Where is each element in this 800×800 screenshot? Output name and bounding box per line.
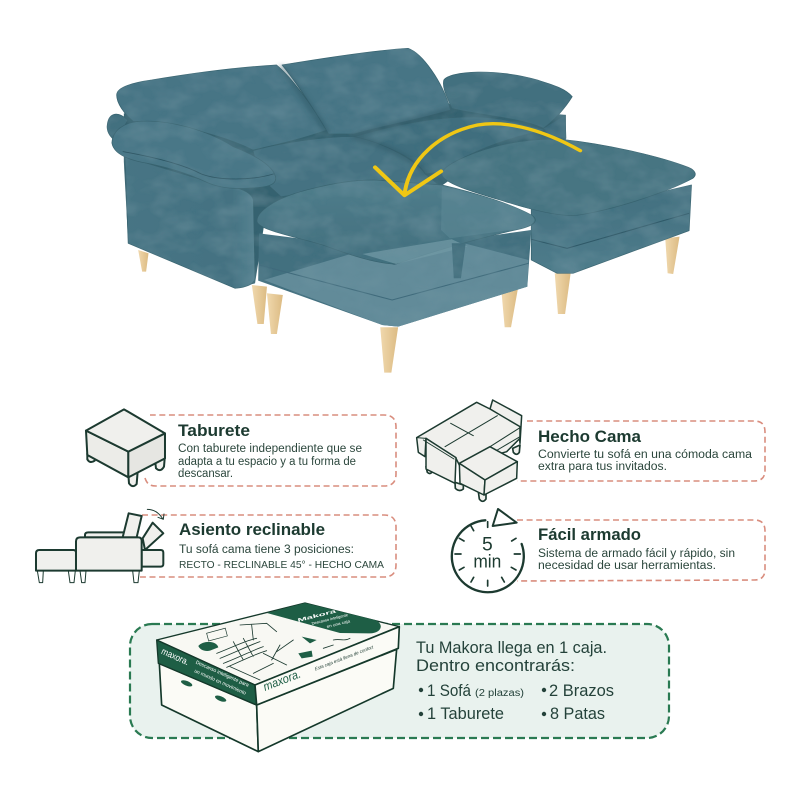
- description: Tu sofá cama tiene 3 posiciones:: [179, 544, 354, 556]
- heading: Fácil armado: [538, 525, 641, 544]
- icon: 5 minute timer: [452, 509, 524, 592]
- icon: sofa bed: [417, 400, 522, 501]
- icon: reclining sofa: [36, 509, 164, 583]
- illustration: shipping box: [157, 603, 399, 752]
- yellow curved arrow: [375, 124, 580, 195]
- intro text: [416, 638, 607, 675]
- box texts: Descanso inteligente: [311, 612, 349, 626]
- right ottoman legs: [555, 237, 680, 314]
- box texts: maxora.: [160, 646, 191, 667]
- box texts: Esta caja está llena de confort: [314, 644, 375, 672]
- description: [178, 443, 362, 480]
- intro text: Dentro encontrarás:: [416, 656, 575, 675]
- right ottoman upholstery: [442, 139, 695, 273]
- dashed frame: [517, 520, 765, 581]
- description: Convierte tu sofá en una cómoda cama: [538, 449, 753, 461]
- icon: 5 minute timer: min: [473, 551, 501, 572]
- lid illustration lines: [198, 623, 350, 680]
- box texts: [160, 608, 375, 697]
- panel: box contents: [130, 603, 669, 752]
- sofa body: [107, 48, 572, 288]
- lid label patch: [267, 603, 381, 633]
- box texts: maxora.: [261, 667, 303, 694]
- panel: Fácil armado: [452, 509, 765, 592]
- description: [538, 548, 735, 572]
- description: [179, 544, 384, 571]
- contents list: 8 Patas: [550, 704, 605, 723]
- description: Con taburete independiente que se: [178, 443, 362, 455]
- box texts: Descanso inteligente para: [195, 660, 250, 689]
- front ottoman legs: [267, 287, 518, 373]
- dashed frame: [145, 415, 396, 486]
- dashed green frame: [130, 624, 669, 738]
- lid side left: [157, 640, 257, 705]
- contents list: 1 Taburete: [427, 704, 504, 723]
- description: necesidad de usar herramientas.: [538, 560, 716, 572]
- panel: Asiento reclinable: [36, 509, 396, 583]
- dashed frame: [517, 421, 765, 481]
- lid top: [157, 603, 399, 685]
- sofa shading creases: [282, 67, 450, 173]
- heading: Hecho Cama: [538, 427, 642, 446]
- dashed frame: [140, 515, 396, 577]
- right ottoman: [442, 139, 695, 314]
- contents list: 1 Sofá: [427, 681, 471, 700]
- contents list: [419, 681, 614, 723]
- intro text: Tu Makora llega en 1 caja.: [416, 638, 607, 657]
- lid side right: [255, 627, 399, 705]
- description: adapta a tu espacio y a tu forma de: [178, 456, 356, 468]
- description: extra para tus invitados.: [538, 461, 667, 473]
- box texts: en una caja: [326, 618, 351, 629]
- icon: ottoman: [86, 409, 165, 486]
- box hand holes: [180, 679, 227, 703]
- front ottoman upholstery: [257, 180, 535, 327]
- panel: Taburete: [86, 409, 396, 486]
- box texts: un mundo en movimiento: [193, 668, 247, 697]
- description: descansar.: [178, 468, 233, 480]
- contents list: 2 Brazos: [549, 681, 614, 700]
- heading: Asiento reclinable: [179, 520, 325, 539]
- description: Sistema de armado fácil y rápido, sin: [538, 548, 735, 560]
- sofa legs rear: [138, 250, 267, 324]
- description: [538, 449, 753, 473]
- description: RECTO - RECLINABLE 45° - HECHO CAMA: [179, 559, 384, 571]
- front ottoman: [257, 180, 535, 373]
- icon: 5 minute timer: 5: [482, 534, 493, 555]
- contents list: (2 plazas): [475, 688, 524, 699]
- panel: Hecho Cama: [417, 400, 765, 501]
- sofa photo illustration: [107, 48, 695, 373]
- box texts: Makora: [297, 608, 337, 624]
- heading: Taburete: [178, 421, 250, 440]
